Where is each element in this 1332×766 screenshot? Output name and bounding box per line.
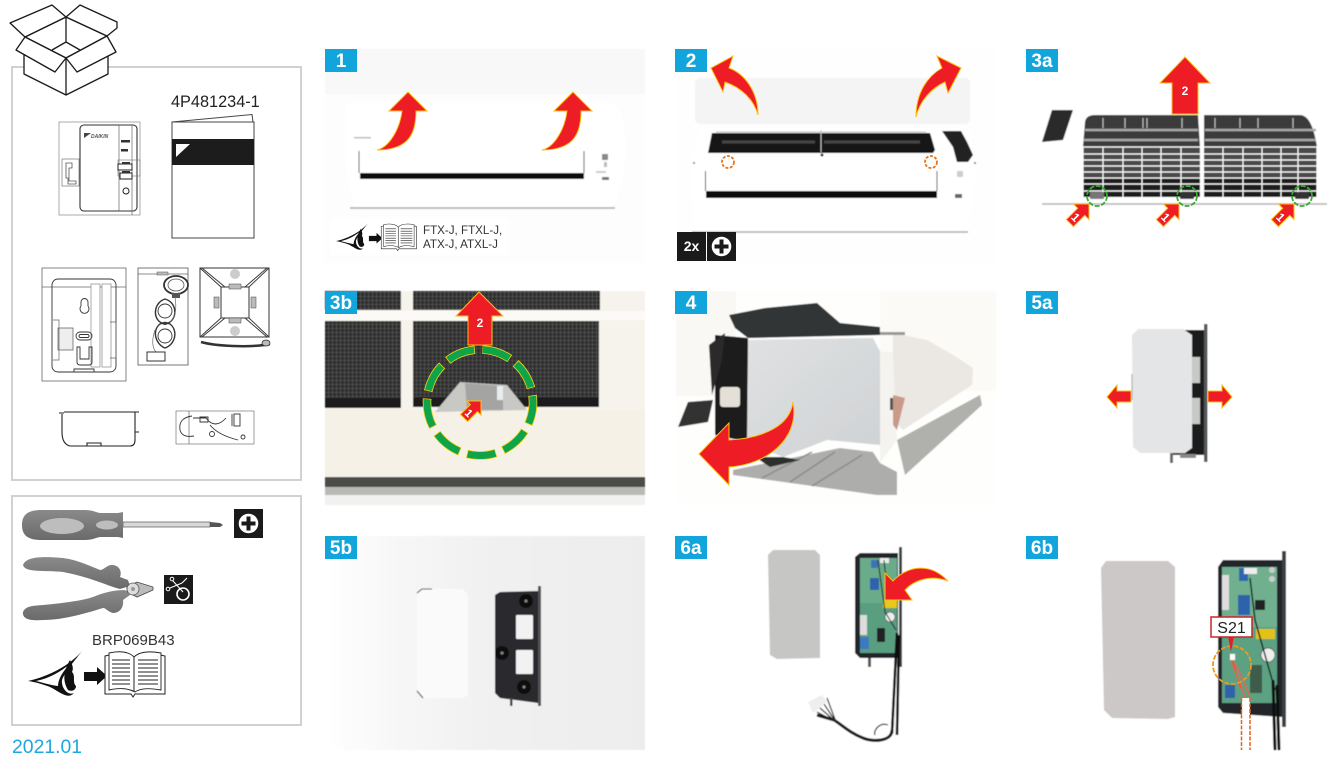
step 3b label: 3b	[330, 293, 352, 314]
panel: step 3a photo	[1026, 49, 1332, 263]
part: metal cover	[59, 412, 139, 446]
step 5b label	[325, 536, 357, 559]
marker: dashed clip ring	[424, 347, 536, 458]
panel: tools	[12, 496, 301, 725]
callout: S21: S21	[1217, 620, 1246, 637]
step 1 label	[325, 49, 357, 72]
arrow: lift up	[456, 292, 503, 345]
arrow: press clip: 1	[462, 407, 475, 420]
part: connection cable	[138, 268, 188, 365]
arrow: pull left	[1107, 385, 1131, 408]
panel: step 5b photo	[325, 536, 645, 750]
arrow: press left clip	[1062, 196, 1097, 231]
step 5a label	[1026, 291, 1058, 314]
panel: step 5a photo	[1026, 291, 1332, 505]
icon: open cardboard box	[10, 5, 117, 95]
step 3a label	[1026, 49, 1058, 72]
panel: step 3b photo	[325, 291, 645, 505]
arrow: press clip	[457, 394, 488, 425]
step 2 label: 2	[686, 51, 696, 72]
marker: clip centre	[1177, 186, 1197, 206]
arrow: press centre clip	[1152, 196, 1187, 231]
part number: 4P481234-1	[171, 93, 260, 111]
panel: box contents	[12, 67, 301, 480]
arrow: lift filter	[1160, 57, 1210, 114]
arrow: press left clip: 1	[1068, 210, 1083, 225]
icon: see manual small	[336, 224, 416, 251]
arrow: press right clip	[1267, 196, 1302, 231]
panel: step 2 photo	[675, 49, 996, 263]
panel: step 6b photo	[1026, 536, 1332, 750]
step 4 label	[675, 291, 707, 314]
step 6a label: 6a	[680, 538, 702, 559]
badge: two screws: 2x	[684, 238, 699, 254]
marker: clip left	[1087, 186, 1107, 206]
icon: cut badge	[164, 575, 193, 604]
callout: S21	[1211, 617, 1252, 652]
step 5b label: 5b	[330, 538, 352, 559]
panel: step 4 photo	[675, 291, 996, 505]
adapter reference code: BRP069B43	[92, 632, 175, 649]
badge: two screws	[677, 232, 706, 261]
wire strip	[1242, 698, 1250, 750]
step 6b label: 6b	[1031, 538, 1053, 559]
step 3a label: 3a	[1031, 51, 1053, 72]
part: cable tie mount	[200, 268, 270, 346]
part: wireless adapter: DAIKIN	[91, 134, 109, 140]
marker: S21 connector ring	[1213, 646, 1251, 684]
arrow: press centre clip: 1	[1158, 210, 1173, 225]
step 6b label	[1026, 536, 1058, 559]
arrow: pull right	[1208, 385, 1232, 408]
icon: phillips badge	[707, 232, 736, 261]
icon: screwdriver	[22, 510, 223, 540]
arrow: open left	[711, 56, 758, 115]
part: harness bag	[176, 411, 254, 444]
step 4 label: 4	[686, 293, 697, 314]
icon: see the manual	[28, 651, 165, 697]
date code: 2021.01	[12, 736, 82, 758]
model list	[423, 224, 502, 251]
step 6a label	[675, 536, 707, 559]
icon: phillips badge	[234, 509, 263, 538]
panel: step 6a photo	[675, 536, 996, 750]
arrow: lift left	[377, 92, 427, 150]
step 5a label: 5a	[1031, 293, 1053, 314]
screw marker left	[722, 156, 734, 168]
step 3b label	[325, 291, 357, 314]
icon: manual booklet	[172, 114, 254, 238]
icon: side cutters	[23, 557, 153, 620]
part: mounting plate	[42, 268, 126, 381]
model list: FTX-J, FTXL-J,	[423, 224, 502, 237]
arrow: press right clip: 1	[1273, 210, 1288, 225]
part: wireless adapter	[59, 122, 140, 215]
arrow: lift filter: 2	[1182, 84, 1189, 98]
marker: clip right	[1292, 186, 1312, 206]
arrow: locate connector	[885, 568, 948, 600]
step 1 label: 1	[336, 51, 347, 72]
step 2 label	[675, 49, 707, 72]
panel: step 1 photo	[325, 49, 645, 263]
arrow: lift right	[542, 92, 592, 150]
arrow: lift up: 2	[477, 316, 484, 330]
arrow: swing forward	[699, 402, 794, 485]
screw marker right	[925, 156, 937, 168]
arrow: open right	[916, 56, 961, 117]
model list: ATX-J, ATXL-J	[423, 238, 498, 251]
